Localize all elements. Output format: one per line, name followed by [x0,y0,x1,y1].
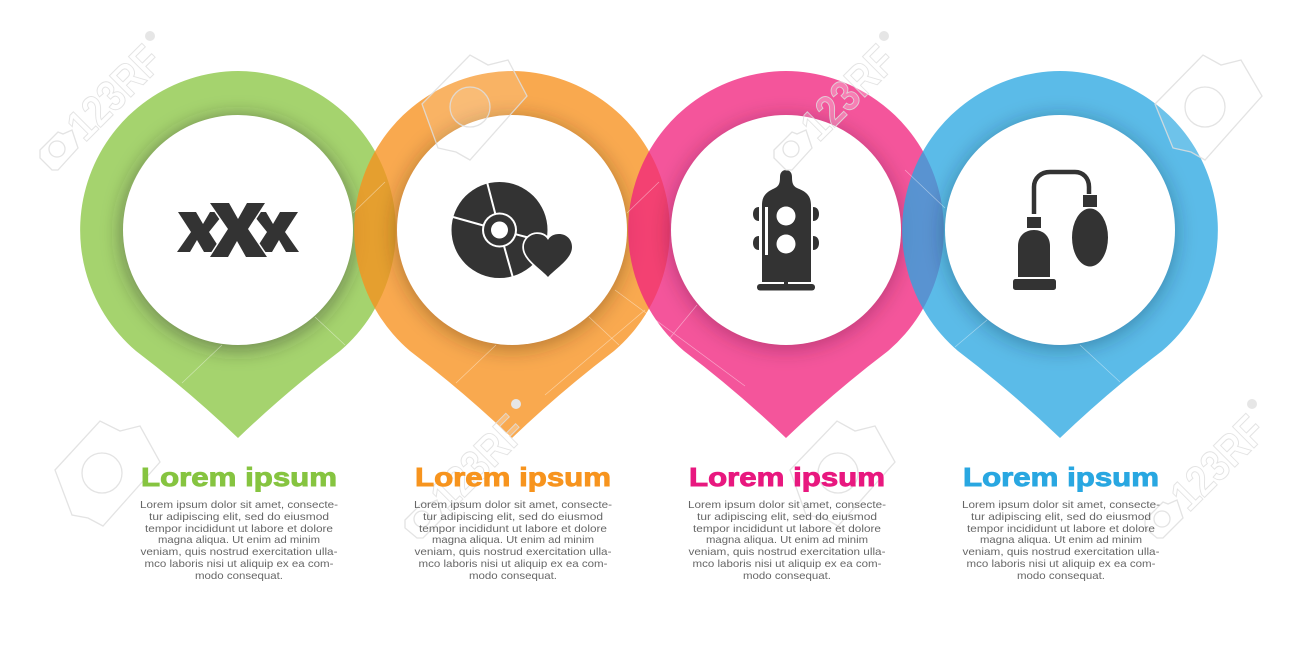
panel: green pin [80,71,396,438]
pink pin shadow [668,115,904,351]
thin white scratch lines [182,170,1120,395]
body: pink: modo consequat. [743,570,831,582]
watermark 1: 123RF [57,36,171,150]
blue white circle [945,115,1175,345]
body: pink [688,499,887,582]
green pin shape [80,71,396,438]
pink pin shape [628,71,944,438]
body: blue: Lorem ipsum dolor sit amet, consecte- [962,499,1161,511]
body: green: tur adipiscing elit, sed do eiusmod [149,511,329,523]
body: blue: modo consequat. [1017,570,1105,582]
green white circle [123,115,353,345]
text block: orange [414,462,613,582]
heading: blue: Lorem ipsum [963,462,1159,492]
watermark 2: 123RF [791,36,905,150]
body: orange: magna aliqua. Ut enim ad minim [432,534,594,546]
body: pink: magna aliqua. Ut enim ad minim [706,534,868,546]
body: pink: mco laboris nisi ut aliquip ex ea com- [692,558,882,570]
pink white circle [671,115,901,345]
heading: orange: Lorem ipsum [415,462,611,492]
watermark 4 [1145,399,1275,538]
watermark 3 [405,399,535,538]
body: blue [962,499,1161,582]
body: orange: veniam, quis nostrud exercitation ulla- [414,546,612,558]
icon: xxx [177,203,299,257]
heading: pink: Lorem ipsum [689,462,885,492]
panel: pink pin [628,71,944,438]
body: pink: tur adipiscing elit, sed do eiusmod [697,511,877,523]
text block: green [140,462,339,582]
blue pin shape [902,71,1218,438]
body: green: magna aliqua. Ut enim ad minim [158,534,320,546]
body: blue: tempor incididunt ut labore et dolore [967,523,1155,535]
orange pin shadow [394,115,630,351]
icon: condom figure [753,170,819,290]
icon: pump [1013,172,1108,290]
body: green: modo consequat. [195,570,283,582]
orange pin shape [354,71,670,438]
text block: pink [688,462,887,582]
body: orange: tur adipiscing elit, sed do eiusmod [423,511,603,523]
body: pink: veniam, quis nostrud exercitation ulla- [688,546,886,558]
body: green: veniam, quis nostrud exercitation ulla- [140,546,338,558]
watermark camera 1 [55,421,160,526]
text block: blue [962,462,1161,582]
green pin shadow [120,115,356,351]
body: orange: mco laboris nisi ut aliquip ex ea com- [418,558,608,570]
panel: orange pin [354,71,670,438]
watermark 4: 123RF [1161,406,1275,520]
watermark camera 2 [422,55,527,160]
body: pink: Lorem ipsum dolor sit amet, consecte- [688,499,887,511]
body: green [140,499,339,582]
orange white circle [397,115,627,345]
watermark 3: 123RF [421,406,535,520]
body: orange: tempor incididunt ut labore et dolore [419,523,607,535]
body: orange: modo consequat. [469,570,557,582]
body: green: Lorem ipsum dolor sit amet, consecte- [140,499,339,511]
blue pin shadow [942,115,1178,351]
body: blue: magna aliqua. Ut enim ad minim [980,534,1142,546]
panel: blue pin [902,71,1218,438]
body: pink: tempor incididunt ut labore et dolore [693,523,881,535]
body: orange: Lorem ipsum dolor sit amet, consecte- [414,499,613,511]
body: green: mco laboris nisi ut aliquip ex ea com- [144,558,334,570]
body: orange [414,499,613,582]
watermark camera 4 [1155,55,1262,160]
icon: disc with heart [452,182,572,278]
heading: green: Lorem ipsum [141,462,337,492]
body: blue: tur adipiscing elit, sed do eiusmod [971,511,1151,523]
watermark 2 [774,31,905,170]
body: blue: veniam, quis nostrud exercitation ulla- [962,546,1160,558]
body: green: tempor incididunt ut labore et dolore [145,523,333,535]
body: blue: mco laboris nisi ut aliquip ex ea com- [966,558,1156,570]
watermark camera 3 [790,421,895,526]
watermark 1 [40,31,171,170]
